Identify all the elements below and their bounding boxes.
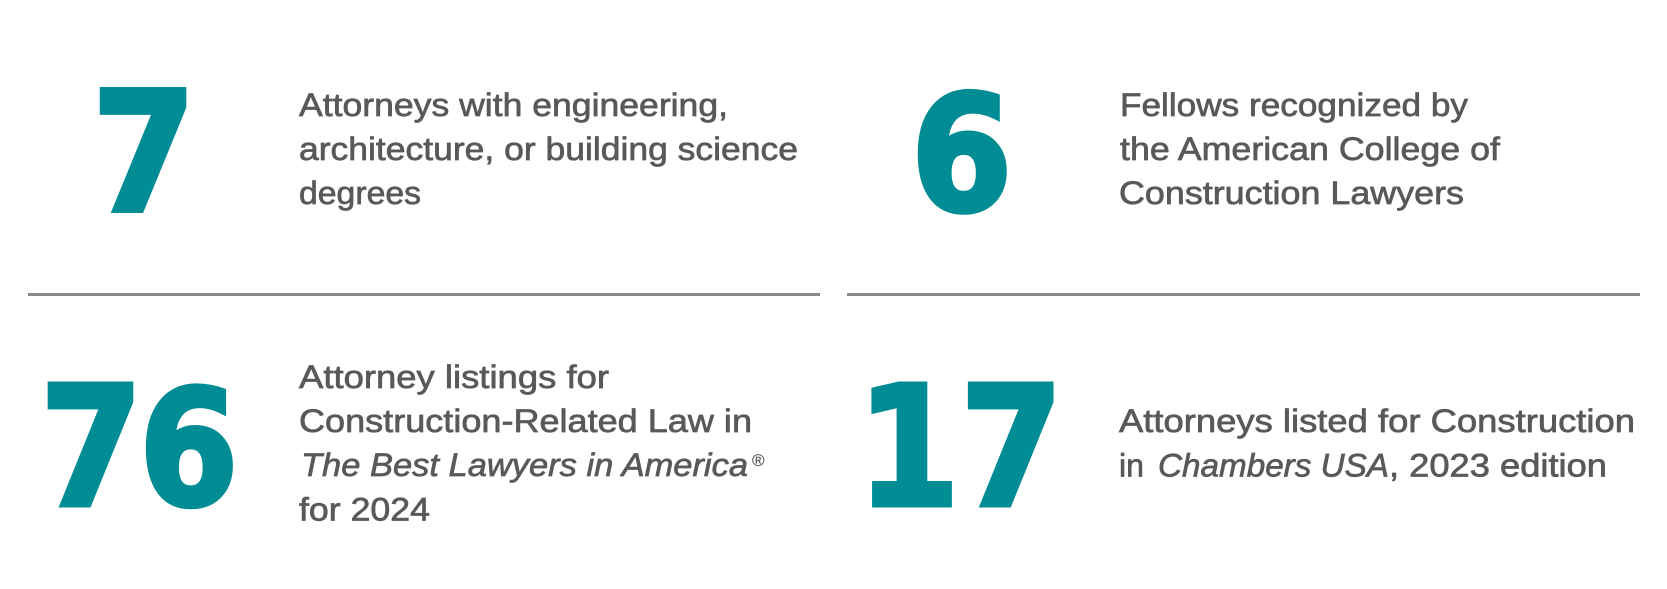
number 17: 17 <box>857 352 1063 545</box>
panel: college fellows stat <box>911 63 1501 249</box>
description: Chambers listings: in <box>1119 448 1144 484</box>
description: fellows recognized: Fellows recognized by <box>1120 87 1469 123</box>
description: Chambers listings: Chambers USA <box>1158 448 1389 484</box>
description: Best Lawyers listings: Attorney listings for <box>299 359 609 395</box>
divider left <box>28 293 820 296</box>
description: Best Lawyers listings: for 2024 <box>299 492 430 528</box>
description: attorneys with degrees: degrees <box>299 175 421 211</box>
description: fellows recognized: the American College of <box>1120 131 1501 167</box>
panel: Chambers USA stat <box>857 352 1635 545</box>
description: Chambers listings: , 2023 edition <box>1389 448 1607 484</box>
description: attorneys with degrees: architecture, or building science <box>299 131 798 167</box>
number 76: 7 <box>40 352 143 545</box>
description: fellows recognized: Construction Lawyers <box>1119 175 1464 211</box>
description: Best Lawyers listings: The Best Lawyers in America <box>301 447 748 483</box>
description: Chambers listings: Attorneys listed for Construction <box>1119 403 1635 439</box>
number 6: 6 <box>911 63 1012 249</box>
divider right <box>847 293 1640 296</box>
panel: Best Lawyers stat <box>40 352 765 545</box>
number 7: 7 <box>92 57 196 250</box>
panel: engineering degrees stat <box>92 57 798 250</box>
description: attorneys with degrees: Attorneys with engineering, <box>299 87 728 123</box>
number 76: 6 <box>139 356 238 543</box>
description: Best Lawyers listings: ® <box>752 451 765 470</box>
description: Best Lawyers listings: Construction-Related Law in <box>299 403 752 439</box>
